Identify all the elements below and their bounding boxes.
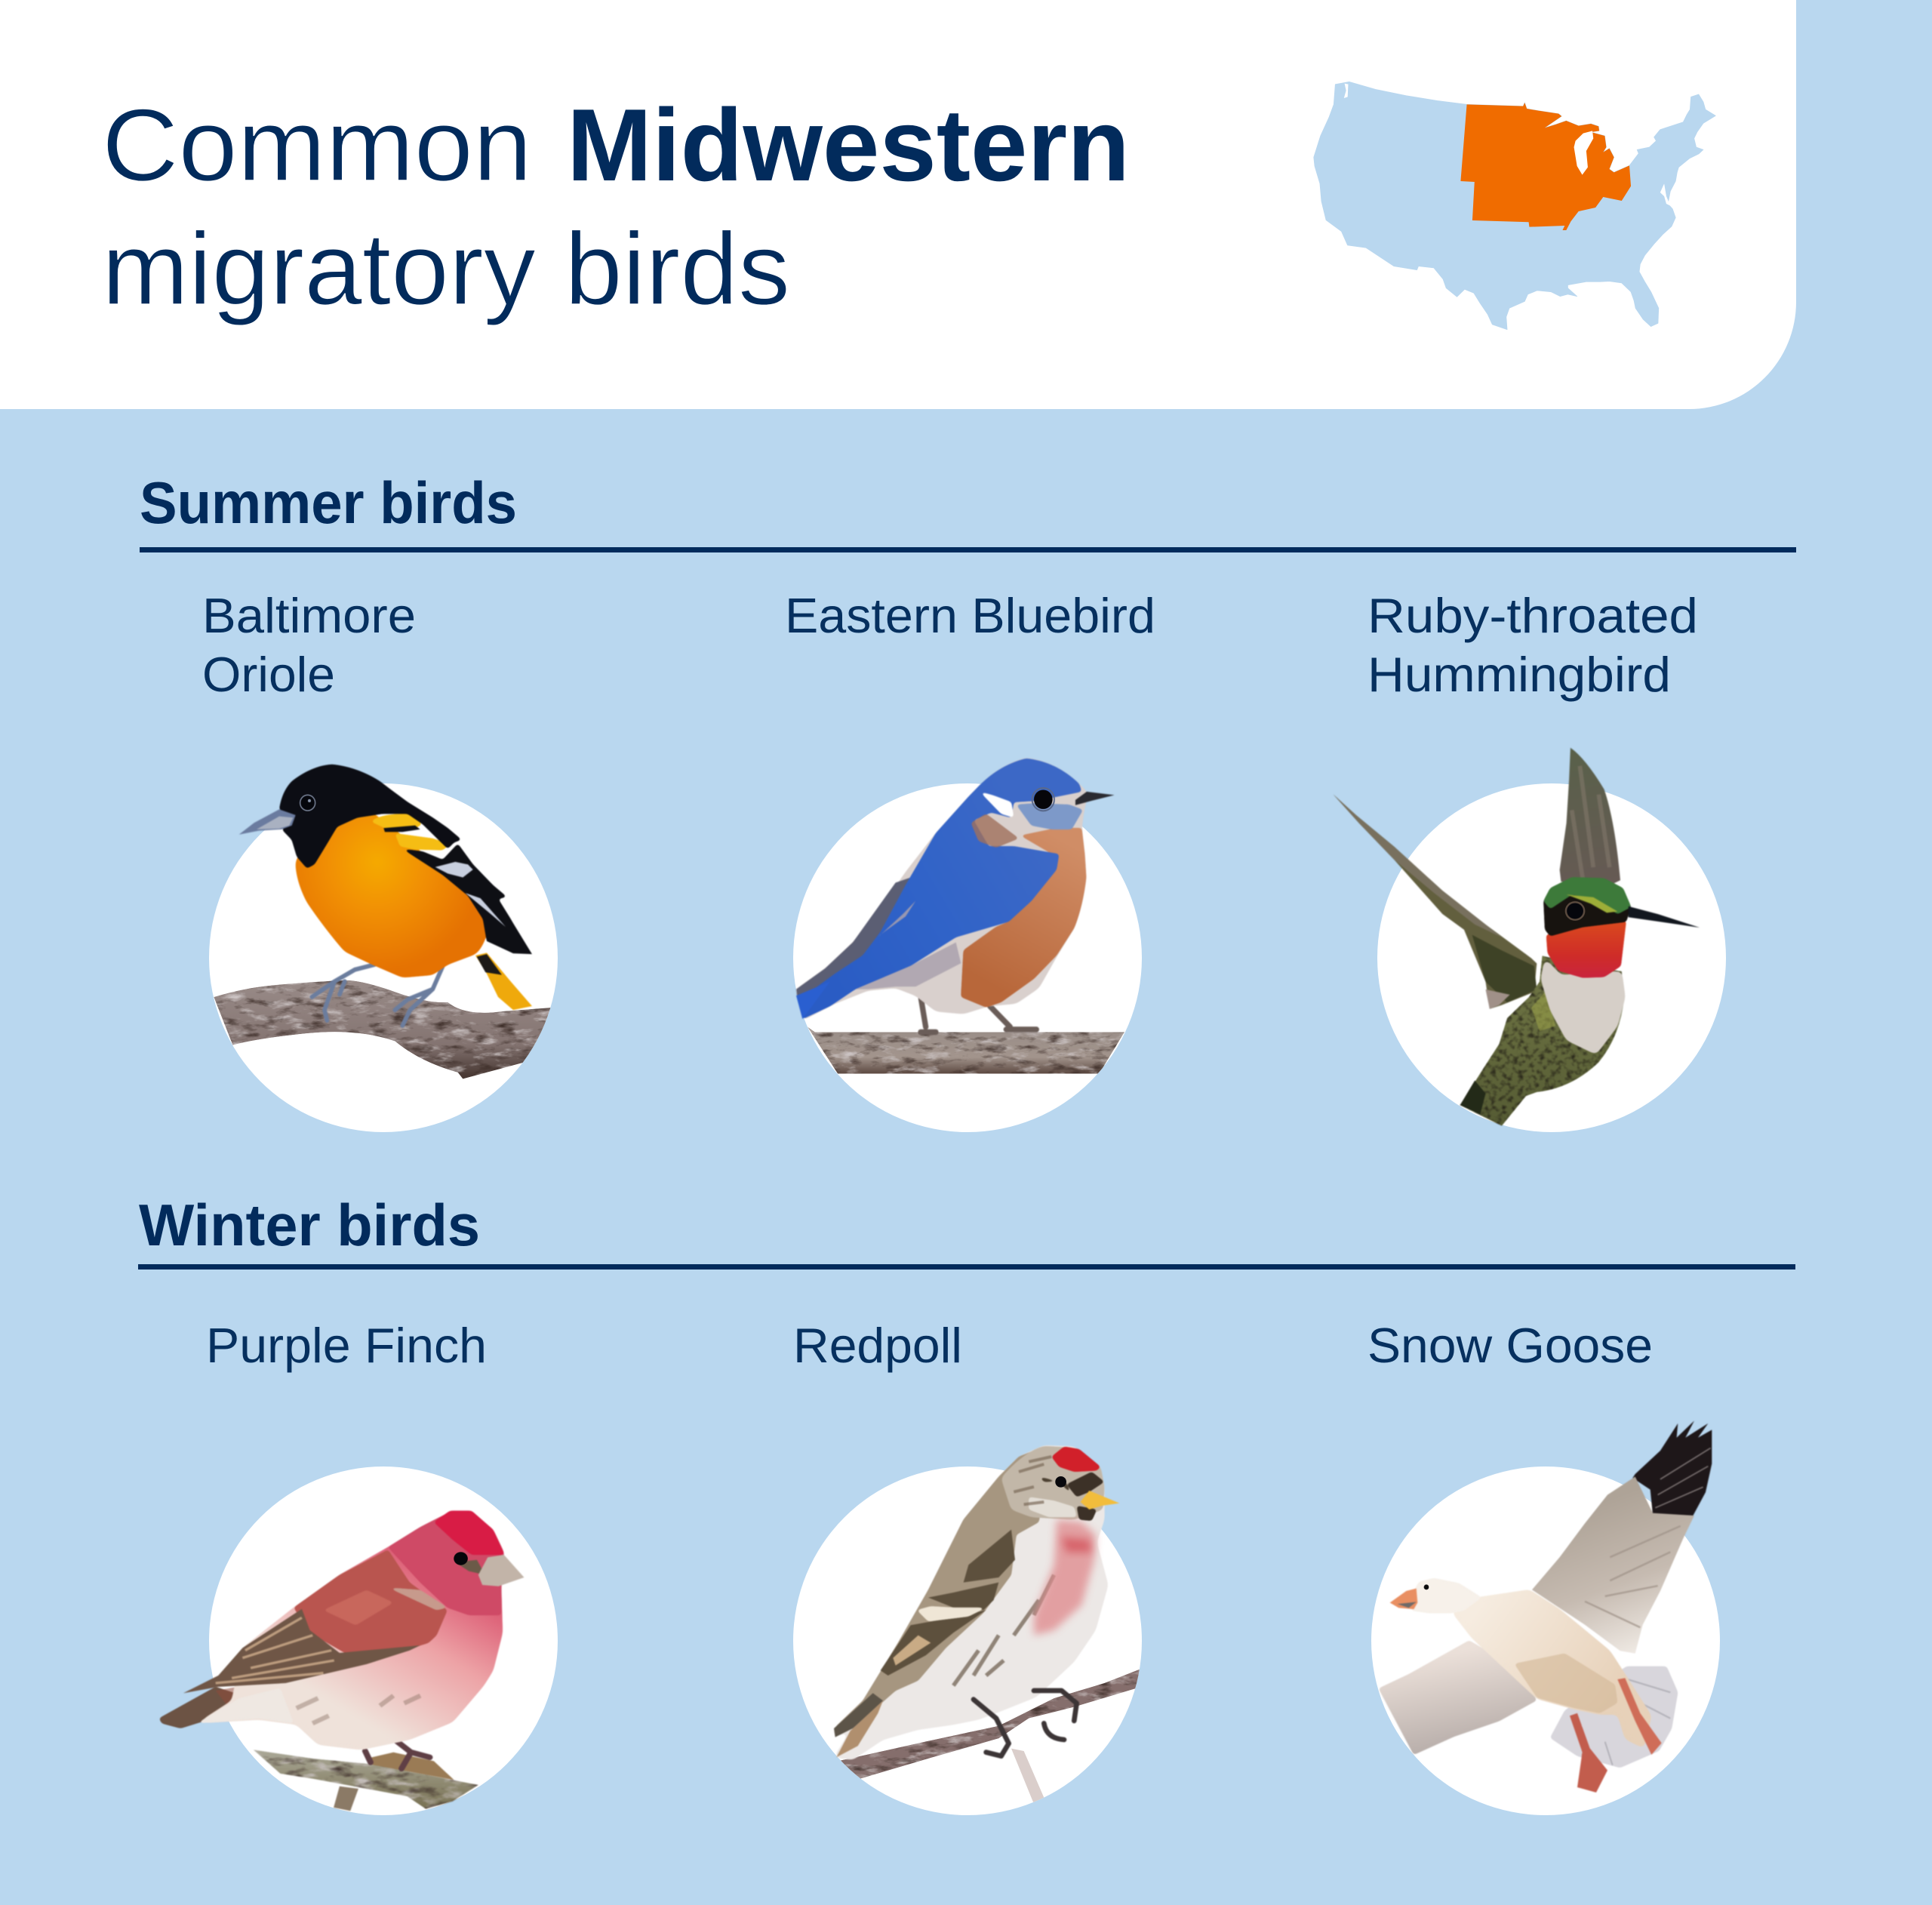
title: Common	[102, 88, 532, 202]
map: United States with Midwest highlighted	[1314, 82, 1715, 330]
title: migratory birds	[102, 211, 790, 326]
bird: Redpoll	[834, 1445, 1119, 1760]
white circle: bluebird	[793, 783, 1142, 1132]
midwest region	[1460, 103, 1631, 230]
bird: Eastern Bluebird	[796, 758, 1115, 1032]
white circle: goose	[1371, 1466, 1720, 1815]
white circle: oriole	[209, 783, 558, 1132]
label: Baltimore Oriole: Baltimore	[202, 588, 416, 643]
header panel	[0, 0, 1796, 409]
title: Midwestern	[567, 88, 1130, 202]
branch: bluebird	[808, 1027, 1124, 1074]
bird: Ruby-throated Hummingbird	[1334, 748, 1700, 1126]
branch: oriole	[214, 980, 553, 1079]
lake michigan	[1574, 131, 1593, 175]
white circle: finch	[209, 1466, 558, 1815]
label: Baltimore Oriole: Oriole	[202, 647, 335, 702]
title	[102, 88, 1130, 326]
heading: summer birds: Summer birds	[140, 469, 517, 536]
bird: Baltimore Oriole	[239, 765, 532, 1026]
label: Ruby-throated Hummingbird: Hummingbird	[1367, 647, 1671, 702]
white circle: hummingbird	[1377, 783, 1726, 1132]
label: Snow Goose: Snow Goose	[1367, 1318, 1653, 1373]
label: Redpoll: Redpoll	[793, 1318, 962, 1373]
rule: summer	[140, 547, 1796, 552]
rule: winter	[138, 1264, 1795, 1269]
branch: redpoll	[838, 1670, 1140, 1804]
bird: Purple Finch	[159, 1511, 524, 1811]
label: Ruby-throated Hummingbird: Ruby-throated	[1367, 588, 1698, 643]
heading: winter birds: Winter birds	[139, 1192, 480, 1258]
label: Eastern Bluebird: Eastern Bluebird	[785, 588, 1155, 643]
label: Purple Finch: Purple Finch	[206, 1318, 487, 1373]
white circle: redpoll	[793, 1466, 1142, 1815]
bird: Snow Goose	[1379, 1420, 1712, 1793]
